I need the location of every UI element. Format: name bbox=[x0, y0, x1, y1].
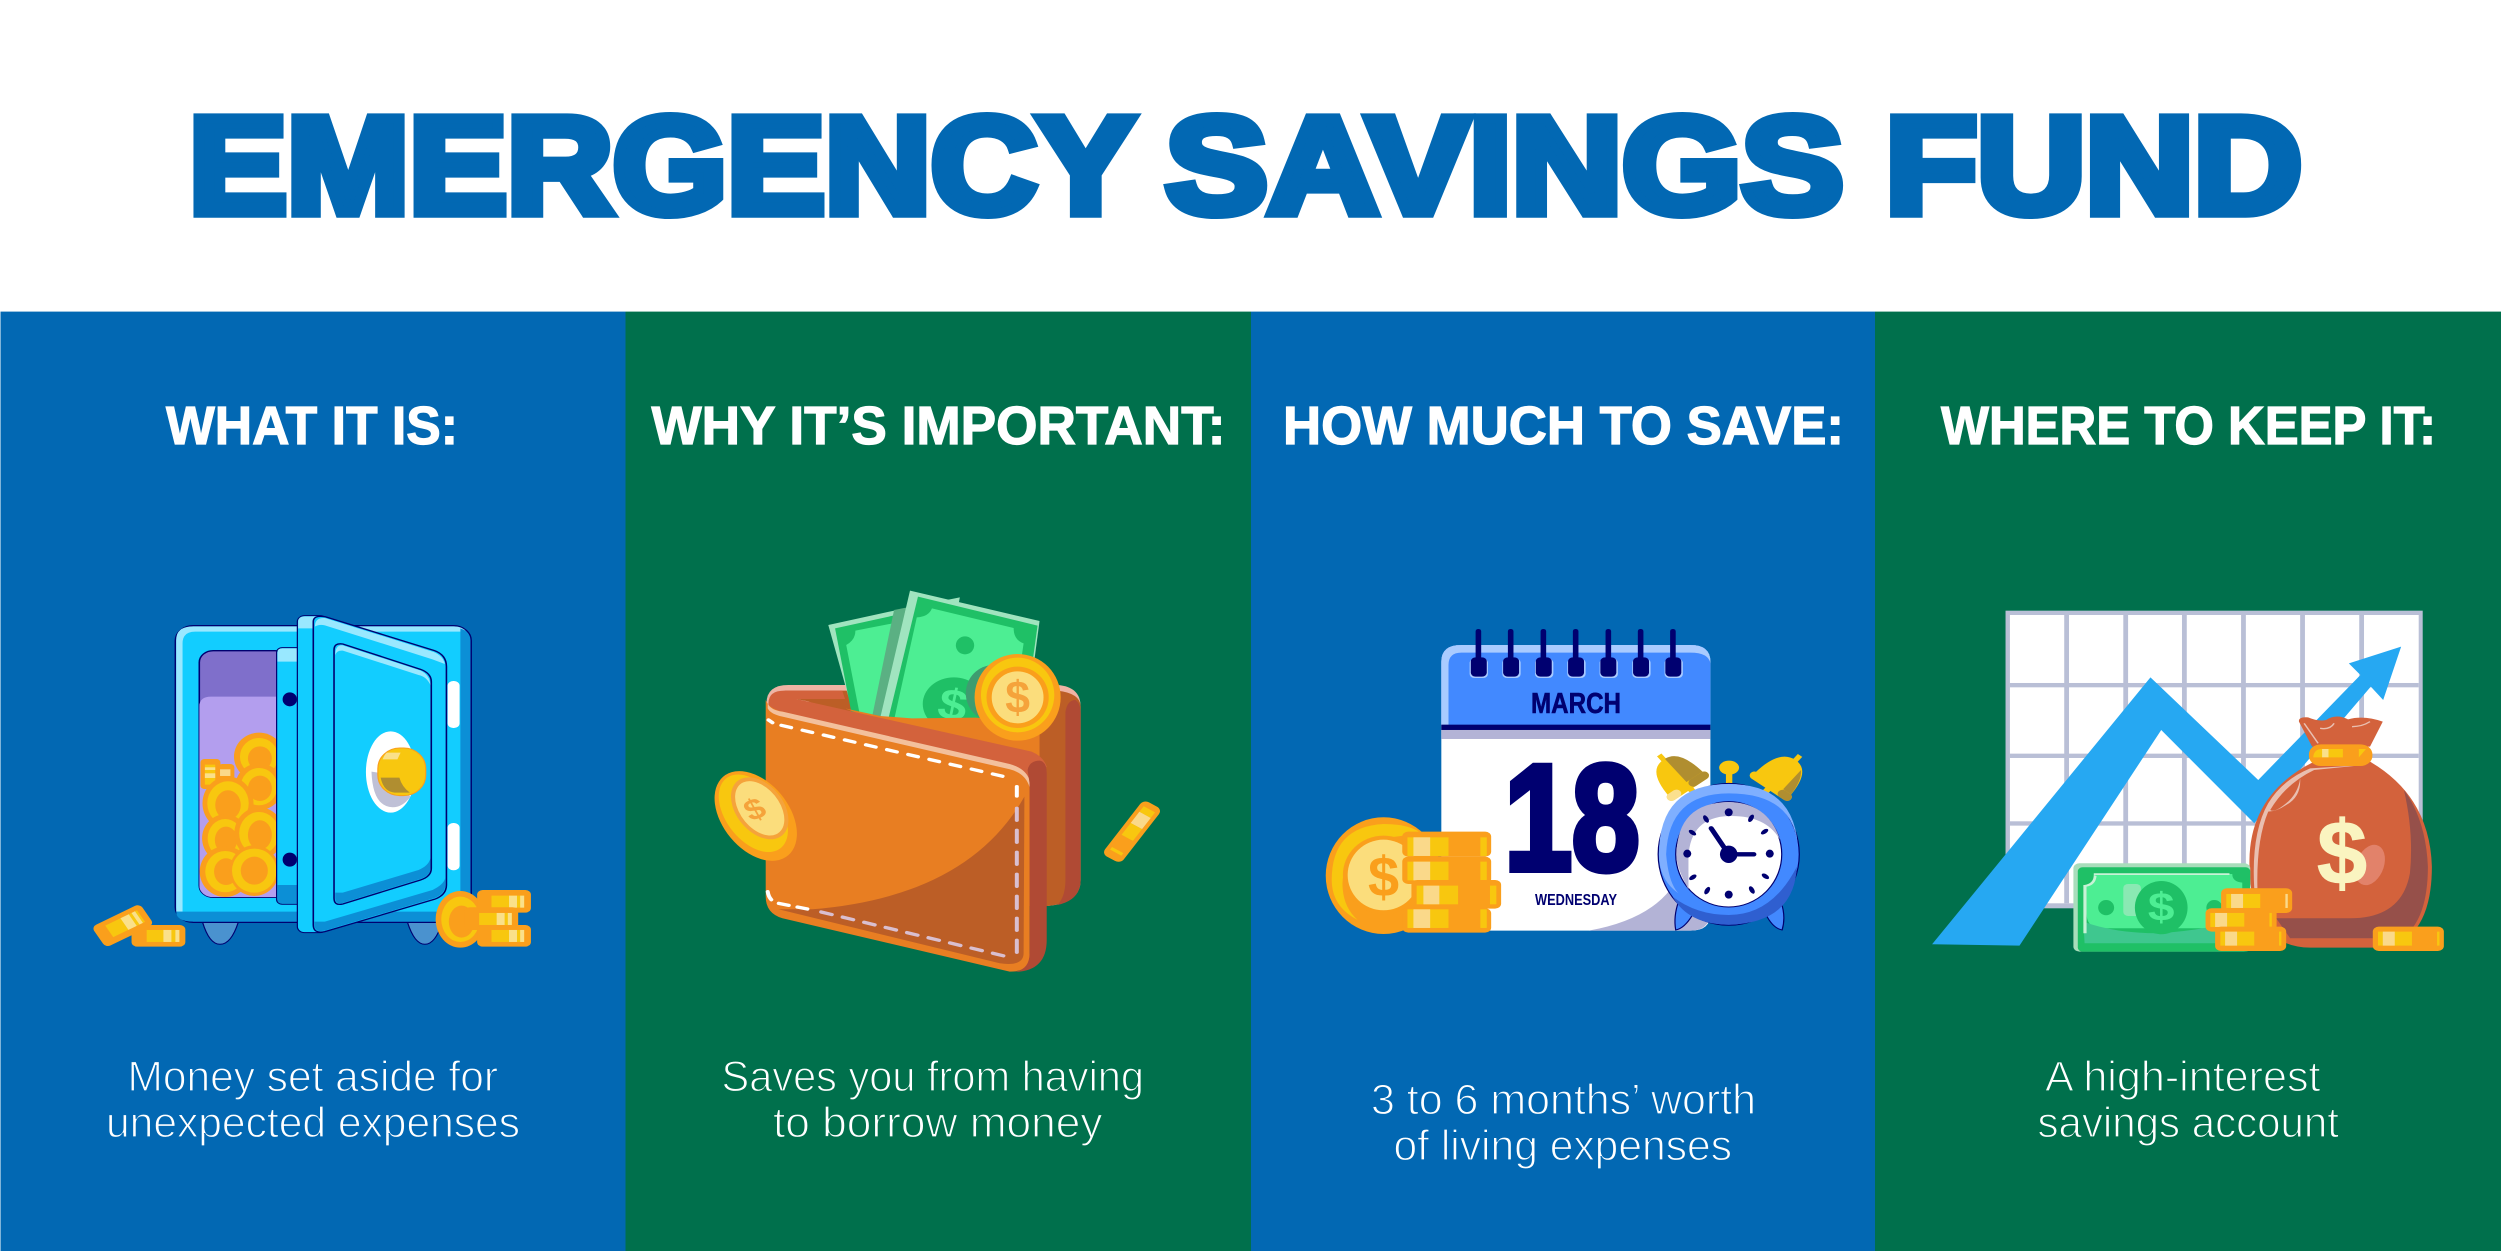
icon: wallet with cash and coins: $ bbox=[934, 680, 972, 731]
icon: rising chart, money bag, cash and coins bbox=[1932, 611, 2444, 952]
body text: where to keep it: A high-interest bbox=[2045, 1053, 2321, 1101]
icon: wallet with cash and coins: $ bbox=[1005, 672, 1030, 723]
body text: why it's important: Saves you from having bbox=[722, 1053, 1144, 1101]
title: EMERGENCY bbox=[189, 90, 1133, 243]
body text: how much to save: 3 to 6 months’ worth bbox=[1371, 1076, 1756, 1124]
body text: where to keep it: savings account bbox=[2038, 1099, 2339, 1147]
icon: wallet with cash and coins: $ bbox=[738, 791, 772, 828]
heading: why it's important: WHY IT’S IMPORTANT: bbox=[652, 396, 1226, 456]
icon: calendar, alarm clock and coins bbox=[1326, 629, 1820, 934]
panel: what it is bbox=[0, 312, 626, 1251]
title: SAVINGS bbox=[1166, 90, 1844, 243]
body text: why it's important: to borrow money bbox=[773, 1099, 1103, 1147]
calendar weekday: WEDNESDAY bbox=[1535, 892, 1617, 909]
money bag dollar sign: $ bbox=[2317, 804, 2367, 904]
calendar month: MARCH bbox=[1531, 688, 1621, 720]
heading: how much to save: HOW MUCH TO SAVE: bbox=[1283, 396, 1844, 456]
icon: wallet with cash and coins bbox=[698, 591, 1162, 972]
calendar date: 18 bbox=[1504, 734, 1640, 902]
panel: where to keep it bbox=[1875, 312, 2501, 1251]
icon: rising chart, money bag, cash and coins: $ bbox=[2148, 885, 2175, 930]
panel: why it's important bbox=[626, 312, 1251, 1251]
heading: where to keep it: WHERE TO KEEP IT: bbox=[1941, 396, 2436, 456]
title: FUND bbox=[1886, 90, 2302, 243]
panel: how much to save bbox=[1251, 312, 1875, 1251]
icon: calendar, alarm clock and coins: $ bbox=[1368, 846, 1399, 909]
body text: what it is: Money set aside for bbox=[128, 1053, 498, 1101]
icon: open safe with coins bbox=[91, 616, 531, 948]
body text: what it is: unexpected expenses bbox=[106, 1099, 520, 1147]
heading: what it is: WHAT IT IS: bbox=[166, 396, 458, 456]
body text: how much to save: of living expenses bbox=[1394, 1122, 1732, 1170]
